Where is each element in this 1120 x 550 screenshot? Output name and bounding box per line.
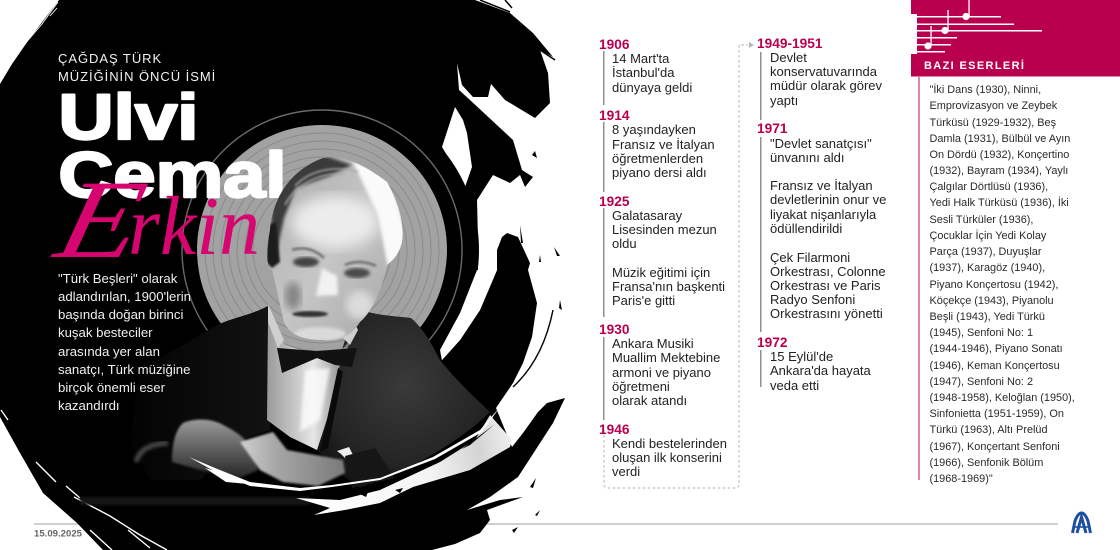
works list: (1948-1958), Keloğlan (1950), xyxy=(930,392,1075,404)
works list: Türküsü (1929-1932), Beş xyxy=(930,117,1057,129)
script name: Erkin: E xyxy=(44,158,157,282)
works list: Damla (1931), Bülbül ve Ayın xyxy=(930,133,1070,145)
intro paragraph xyxy=(58,271,191,413)
event 1930: Ankara Musiki xyxy=(612,336,694,351)
event 1971: liyakat nişanlarıyla xyxy=(770,207,877,222)
intro paragraph: başında doğan birinci xyxy=(58,307,183,322)
works heading: BAZI ESERLERİ xyxy=(924,59,1025,72)
icon: AA logo xyxy=(1072,513,1090,533)
event 1971: 1971 xyxy=(757,121,788,136)
event 1972: 1972 xyxy=(757,335,788,350)
works list: Sesli Türküler (1936), xyxy=(930,214,1033,226)
footer rule xyxy=(34,523,1058,525)
event 1971: Orkestrasını yönetti xyxy=(770,306,883,321)
works list: (1932), Bayram (1934), Yaylı xyxy=(930,165,1068,177)
event 1925: Galatasaray xyxy=(612,208,683,223)
title: Ulvi Cemal: Cemal xyxy=(58,139,286,211)
works list: (1946), Keman Konçertosu xyxy=(930,360,1060,372)
works list: Köçekçe (1943), Piyanolu xyxy=(930,295,1054,307)
intro paragraph: kuşak besteciler xyxy=(58,325,153,340)
ink brush circle xyxy=(0,0,565,550)
works list: (1947), Senfoni No: 2 xyxy=(930,376,1033,388)
event 1971: Çek Filarmoni xyxy=(770,250,850,265)
event 1949-1951: konservatuvarında xyxy=(770,64,878,79)
subtitle: ÇAĞDAŞ TÜRK xyxy=(58,51,162,66)
event 1906: İstanbul'da xyxy=(612,65,675,80)
intro paragraph: "Türk Beşleri" olarak xyxy=(58,271,178,286)
event 1949-1951: 1949-1951 xyxy=(757,36,823,51)
event 1914: 8 yaşındayken xyxy=(612,122,696,137)
event 1971: Orkestrası ve Paris xyxy=(770,278,881,293)
works list: Parça (1937), Duyuşlar xyxy=(930,246,1042,258)
works list: Çocuklar İçin Yedi Kolay xyxy=(930,229,1047,242)
date: 15.09.2025 xyxy=(34,528,83,540)
watch band xyxy=(337,447,354,458)
lower table shadow xyxy=(80,497,310,505)
portrait photo xyxy=(80,150,490,505)
timeline column 1 xyxy=(599,37,727,479)
works list: Piyano Konçertosu (1942), xyxy=(930,279,1058,291)
works list xyxy=(918,77,1075,485)
white brush strokes xyxy=(189,270,512,515)
works list: (1967), Konçertant Senfoni xyxy=(930,441,1060,453)
event 1949-1951: yaptı xyxy=(770,93,798,108)
event 1925: Paris'e gitti xyxy=(612,293,675,308)
intro paragraph: birçok önemli eser xyxy=(58,380,166,395)
event 1946: verdi xyxy=(612,464,640,479)
event 1949-1951: Devlet xyxy=(770,50,807,65)
script name: Erkin: rkin xyxy=(128,180,260,273)
event 1914: 1914 xyxy=(599,108,630,123)
event 1930: 1930 xyxy=(599,322,630,337)
intro paragraph: sanatçı, Türk müziğine xyxy=(58,362,190,377)
event 1906: 1906 xyxy=(599,37,630,52)
event 1930: Muallim Mektebine xyxy=(612,350,720,365)
event 1906 xyxy=(599,37,692,105)
event 1930: armoni ve piyano xyxy=(612,365,711,380)
event 1946: oluşan ilk konserini xyxy=(612,450,722,465)
intro paragraph: kazandırdı xyxy=(58,398,120,413)
event 1971: ödüllendirildi xyxy=(770,221,842,236)
intro paragraph: adlandırılan, 1900'lerin xyxy=(58,289,191,304)
sleeve cuff xyxy=(345,448,395,488)
event 1971: devletlerinin onur ve xyxy=(770,192,886,207)
works list: On Dördü (1932), Konçertino xyxy=(930,149,1069,161)
event 1949-1951: müdür olarak görev xyxy=(770,78,882,93)
icon: music staff xyxy=(911,0,1042,54)
dashed connector arrow xyxy=(604,42,754,488)
event 1972: veda etti xyxy=(770,378,819,393)
works list: Sinfonietta (1951-1959), On xyxy=(930,408,1064,420)
works list: (1945), Senfoni No: 1 xyxy=(930,327,1033,339)
left hand xyxy=(172,420,258,478)
event 1972: Ankara'da hayata xyxy=(770,363,872,378)
event 1906: 14 Mart'ta xyxy=(612,51,670,66)
works list: Çalgılar Dörtlüsü (1936), xyxy=(930,181,1048,193)
event 1930: olarak atandı xyxy=(612,393,687,408)
subtitle xyxy=(58,51,216,84)
collar xyxy=(268,304,358,348)
event 1914: piyano dersi aldı xyxy=(612,165,707,180)
event 1914: öğretmenlerden xyxy=(612,151,703,166)
works list: Türkü (1963), Altı Prelüd xyxy=(930,424,1048,436)
event 1946 xyxy=(599,422,727,479)
event 1925: Müzik eğitimi için xyxy=(612,265,710,280)
head xyxy=(267,158,403,340)
panel: works header xyxy=(911,0,1120,76)
event 1971: Fransız ve İtalyan xyxy=(770,178,873,193)
intro paragraph: arasında yer alan xyxy=(58,344,160,359)
event 1946: 1946 xyxy=(599,422,630,437)
shirt xyxy=(267,320,352,450)
works list: (1968-1969)" xyxy=(930,473,993,485)
timeline column 2 xyxy=(757,36,886,393)
title: Ulvi Cemal: Ulvi xyxy=(58,81,198,153)
forearm and right hand xyxy=(240,432,345,486)
event 1925: oldu xyxy=(612,236,637,251)
event 1949-1951 xyxy=(757,36,882,120)
works list: Yedi Halk Türküsü (1936), İki xyxy=(930,196,1069,209)
event 1906: dünyaya geldi xyxy=(612,80,692,95)
event 1972: 15 Eylül'de xyxy=(770,349,833,364)
works list: (1937), Karagöz (1940), xyxy=(930,262,1045,274)
works list: Beşli (1943), Yedi Türkü xyxy=(930,311,1045,323)
left sleeve highlight xyxy=(136,443,168,462)
works list: (1966), Senfonik Bölüm xyxy=(930,457,1043,469)
event 1925: Lisesinden mezun xyxy=(612,222,717,237)
event 1930 xyxy=(599,322,720,420)
title: Ulvi Cemal xyxy=(58,81,286,211)
event 1914 xyxy=(599,108,715,192)
event 1925 xyxy=(599,194,725,317)
works list: Emprovizasyon ve Zeybek xyxy=(930,100,1058,112)
event 1914: Fransız ve İtalyan xyxy=(612,137,715,152)
jacket xyxy=(130,306,270,480)
event 1930: öğretmeni xyxy=(612,379,670,394)
event 1971: "Devlet sanatçısı" xyxy=(770,136,872,151)
event 1925: 1925 xyxy=(599,194,630,209)
event 1972 xyxy=(757,335,872,393)
event 1971: ünvanını aldı xyxy=(770,150,844,165)
event 1971 xyxy=(757,121,886,332)
works list: "İki Dans (1930), Ninni, xyxy=(930,83,1041,96)
works list: (1944-1946), Piyano Sonatı xyxy=(930,343,1063,355)
script name: Erkin xyxy=(44,158,260,282)
event 1971: Radyo Senfoni xyxy=(770,292,855,307)
vinyl record xyxy=(181,109,479,352)
subtitle: MÜZİĞİNİN ÖNCÜ İSMİ xyxy=(58,69,216,84)
event 1946: Kendi bestelerinden xyxy=(612,436,727,451)
event 1971: Orkestrası, Colonne xyxy=(770,264,886,279)
bow tie xyxy=(277,348,357,373)
event 1925: Fransa'nın başkenti xyxy=(612,279,725,294)
